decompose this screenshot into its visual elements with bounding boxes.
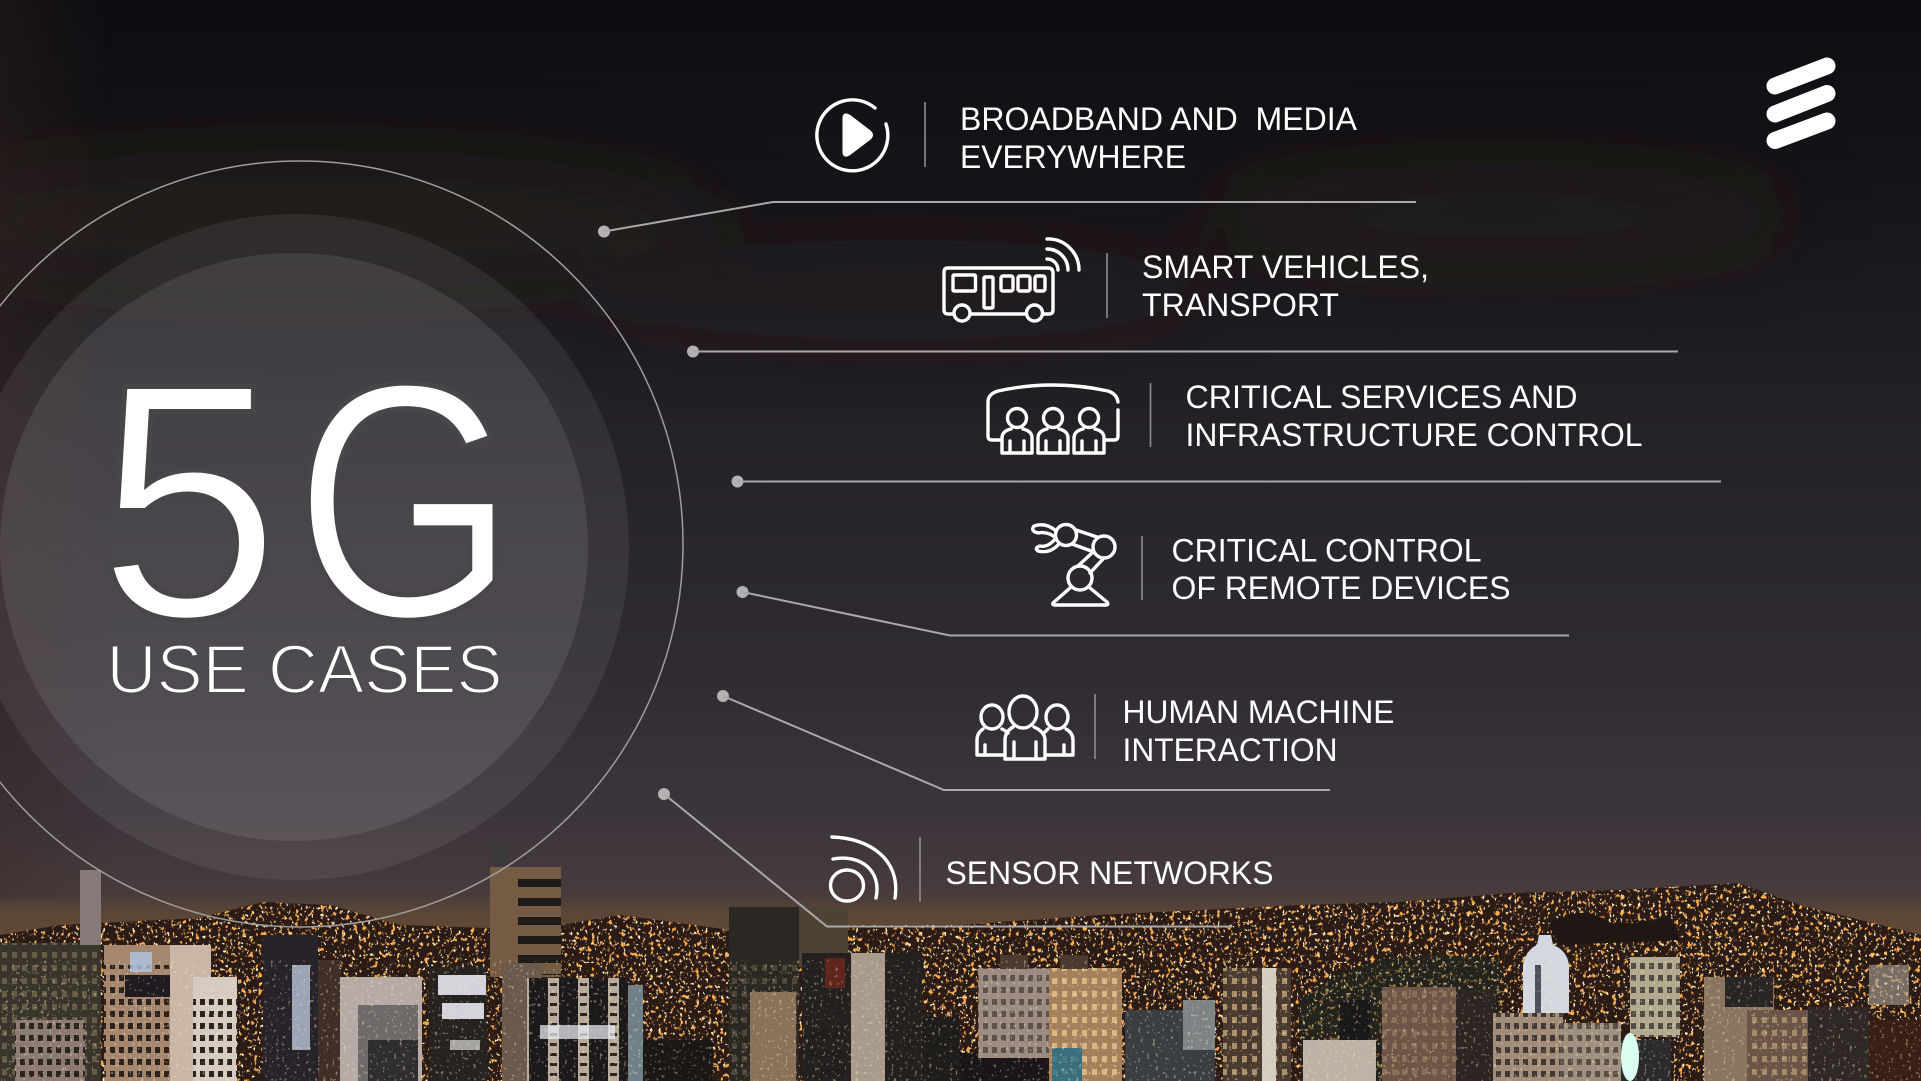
connector: human machine [717,690,1330,790]
use case: smart vehicles [944,239,1429,323]
text: smart vehicles, transport [1142,249,1429,323]
text: broadband and media everywhere: EVERYWHERE [960,139,1186,175]
connector: smart vehicles [687,346,1678,358]
circle: middle translucent ring [0,214,629,880]
connector: critical services [732,476,1721,488]
text: smart vehicles, transport: TRANSPORT [1142,287,1339,323]
connector: remote devices [736,586,1569,636]
text: smart vehicles, transport: SMART VEHICLES, [1142,249,1429,285]
use case: critical services [988,379,1642,453]
left edge warm tint [0,0,110,900]
circle: inner translucent disc [0,253,588,841]
text: critical services and infrastructure control: CRITICAL SERVICES AND [1186,379,1578,415]
heading: 5G: 5 [98,315,280,689]
use case: human machine interaction [977,694,1394,768]
icon: robot arm [1033,524,1115,605]
text: broadband and media everywhere [960,101,1358,175]
use case: sensor networks [830,837,1274,902]
logo: three stripes [1775,66,1827,140]
text: critical control of remote devices [1172,532,1510,606]
text: critical control of remote devices: CRITICAL CONTROL [1172,532,1482,568]
icon: sensor signal [830,837,896,901]
text: critical control of remote devices: OF REMOTE DEVICES [1172,570,1510,606]
clouds: brown haze [0,150,1800,340]
text: broadband and media everywhere: BROADBAND AND MEDIA [960,101,1358,137]
skyline: right buildings [1125,935,1921,1081]
subheading: use cases: USE CASES [106,631,502,708]
circle: outer outline [0,161,683,927]
icon: group of people [977,696,1073,759]
text: human machine interaction: INTERACTION [1122,732,1338,768]
connector: broadband [598,202,1416,238]
connector: sensor networks [658,788,1232,926]
panel: 5G circle badge [0,161,683,927]
text: critical services and infrastructure control [1186,379,1642,453]
icon: play button [817,100,888,171]
hillside city lights [0,883,1921,1081]
skyline: left buildings [0,845,713,1081]
city window sparkle [0,960,1921,1081]
text: critical services and infrastructure control: INFRASTRUCTURE CONTROL [1186,417,1642,453]
use case: broadband and media [817,100,1358,175]
horizon glow [0,905,1921,950]
text: human machine interaction: HUMAN MACHINE [1122,694,1394,730]
use case: critical control of remote devices [1033,524,1510,606]
text: sensor networks: SENSOR NETWORKS [946,855,1274,891]
heading: 5G letter G: G [294,314,516,688]
skyline: central towers [729,907,1122,1081]
icon: control room [988,385,1118,453]
text: human machine interaction [1122,694,1394,768]
icon: connected bus [944,239,1079,321]
